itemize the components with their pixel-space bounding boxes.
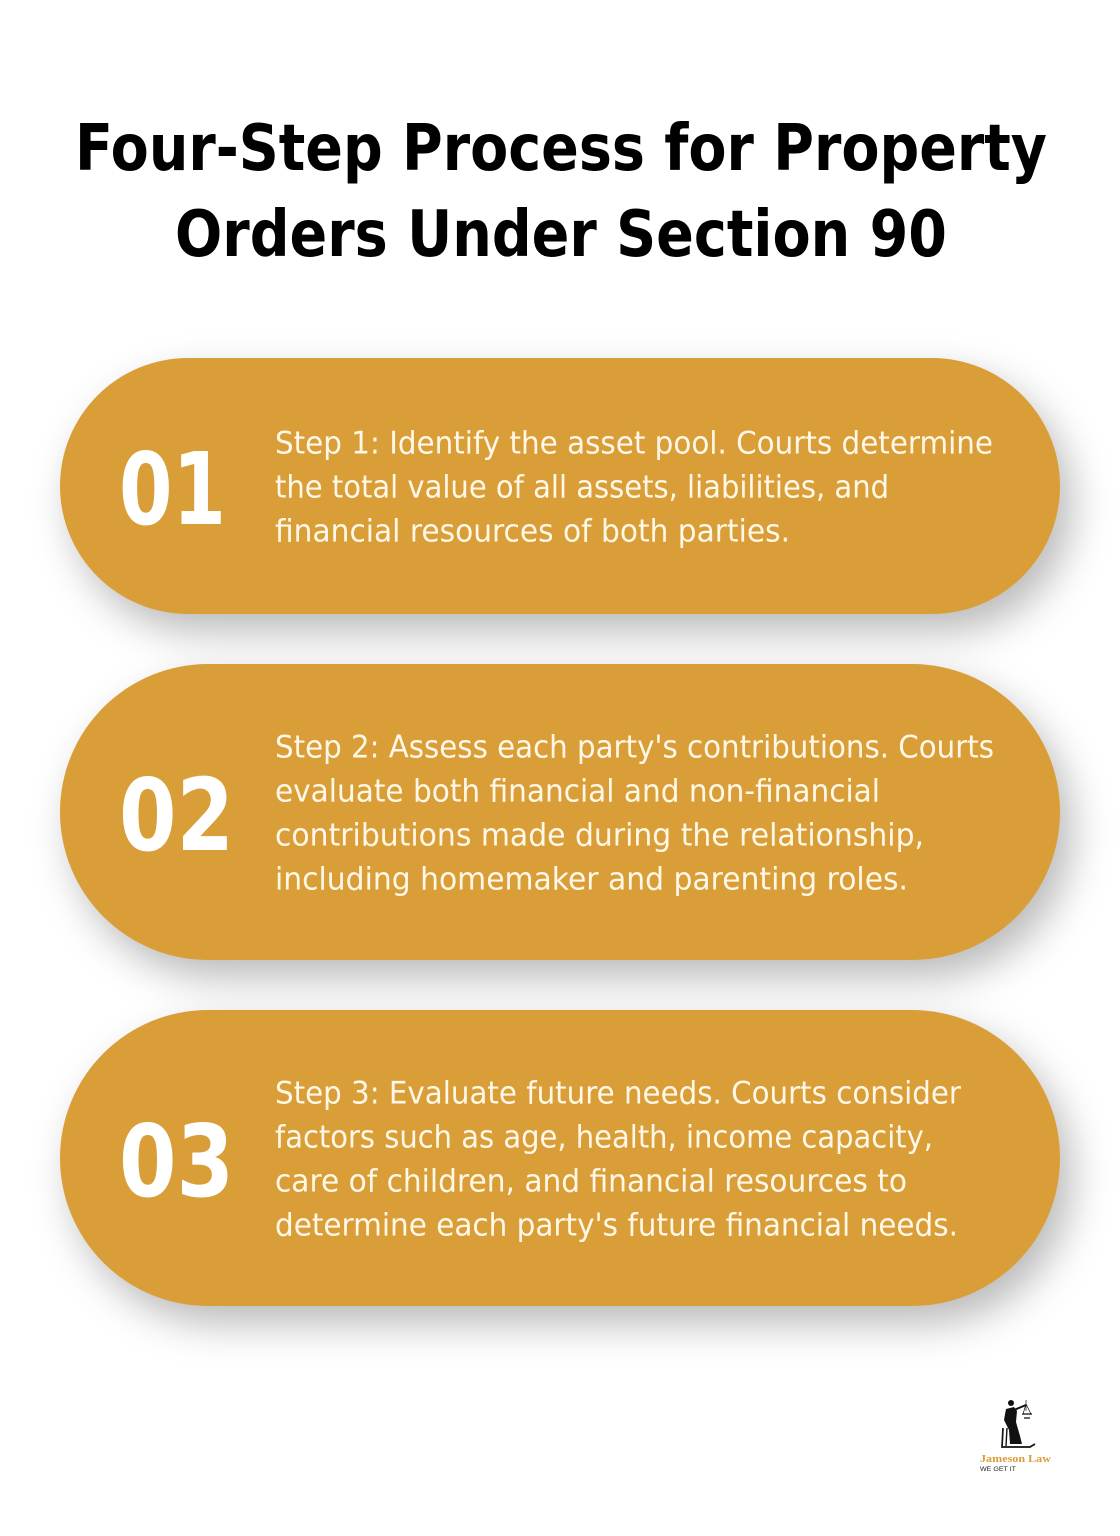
step 3 text: determine each party's future financial needs. [275, 1208, 958, 1244]
step 1 text [275, 426, 993, 550]
icon: lady justice [1002, 1400, 1035, 1447]
step 2 text: evaluate both financial and non-financial [275, 774, 880, 810]
logo name: Jameson Law [980, 1453, 1051, 1465]
step 3 text: care of children, and financial resources to [275, 1164, 907, 1200]
panel: step 3 [60, 1010, 1072, 1324]
title [75, 112, 1047, 272]
step 3 text: factors such as age, health, income capacity, [275, 1120, 933, 1156]
step 2 text [275, 730, 994, 898]
step 1 text: the total value of all assets, liabilities, and [275, 470, 889, 506]
logo: Jameson Law [980, 1400, 1051, 1473]
step number 03: 03 [119, 1103, 234, 1220]
step 2 text: including homemaker and parenting roles. [275, 862, 908, 898]
step 1 text: Step 1: Identify the asset pool. Courts determine [275, 426, 993, 462]
title: Orders Under Section 90 [175, 198, 947, 272]
step 2 text: Step 2: Assess each party's contributions. Courts [275, 730, 994, 766]
step 3 text: Step 3: Evaluate future needs. Courts consider [275, 1076, 961, 1112]
step number 02: 02 [119, 757, 234, 874]
step 1 text: financial resources of both parties. [275, 514, 790, 550]
panel: step 2 [60, 664, 1072, 978]
step number 01: 01 [119, 431, 226, 548]
logo tagline: WE GET IT [980, 1466, 1016, 1473]
panel: step 1 [60, 358, 1072, 632]
step 3 text [275, 1076, 961, 1244]
step 2 text: contributions made during the relationship, [275, 818, 924, 854]
